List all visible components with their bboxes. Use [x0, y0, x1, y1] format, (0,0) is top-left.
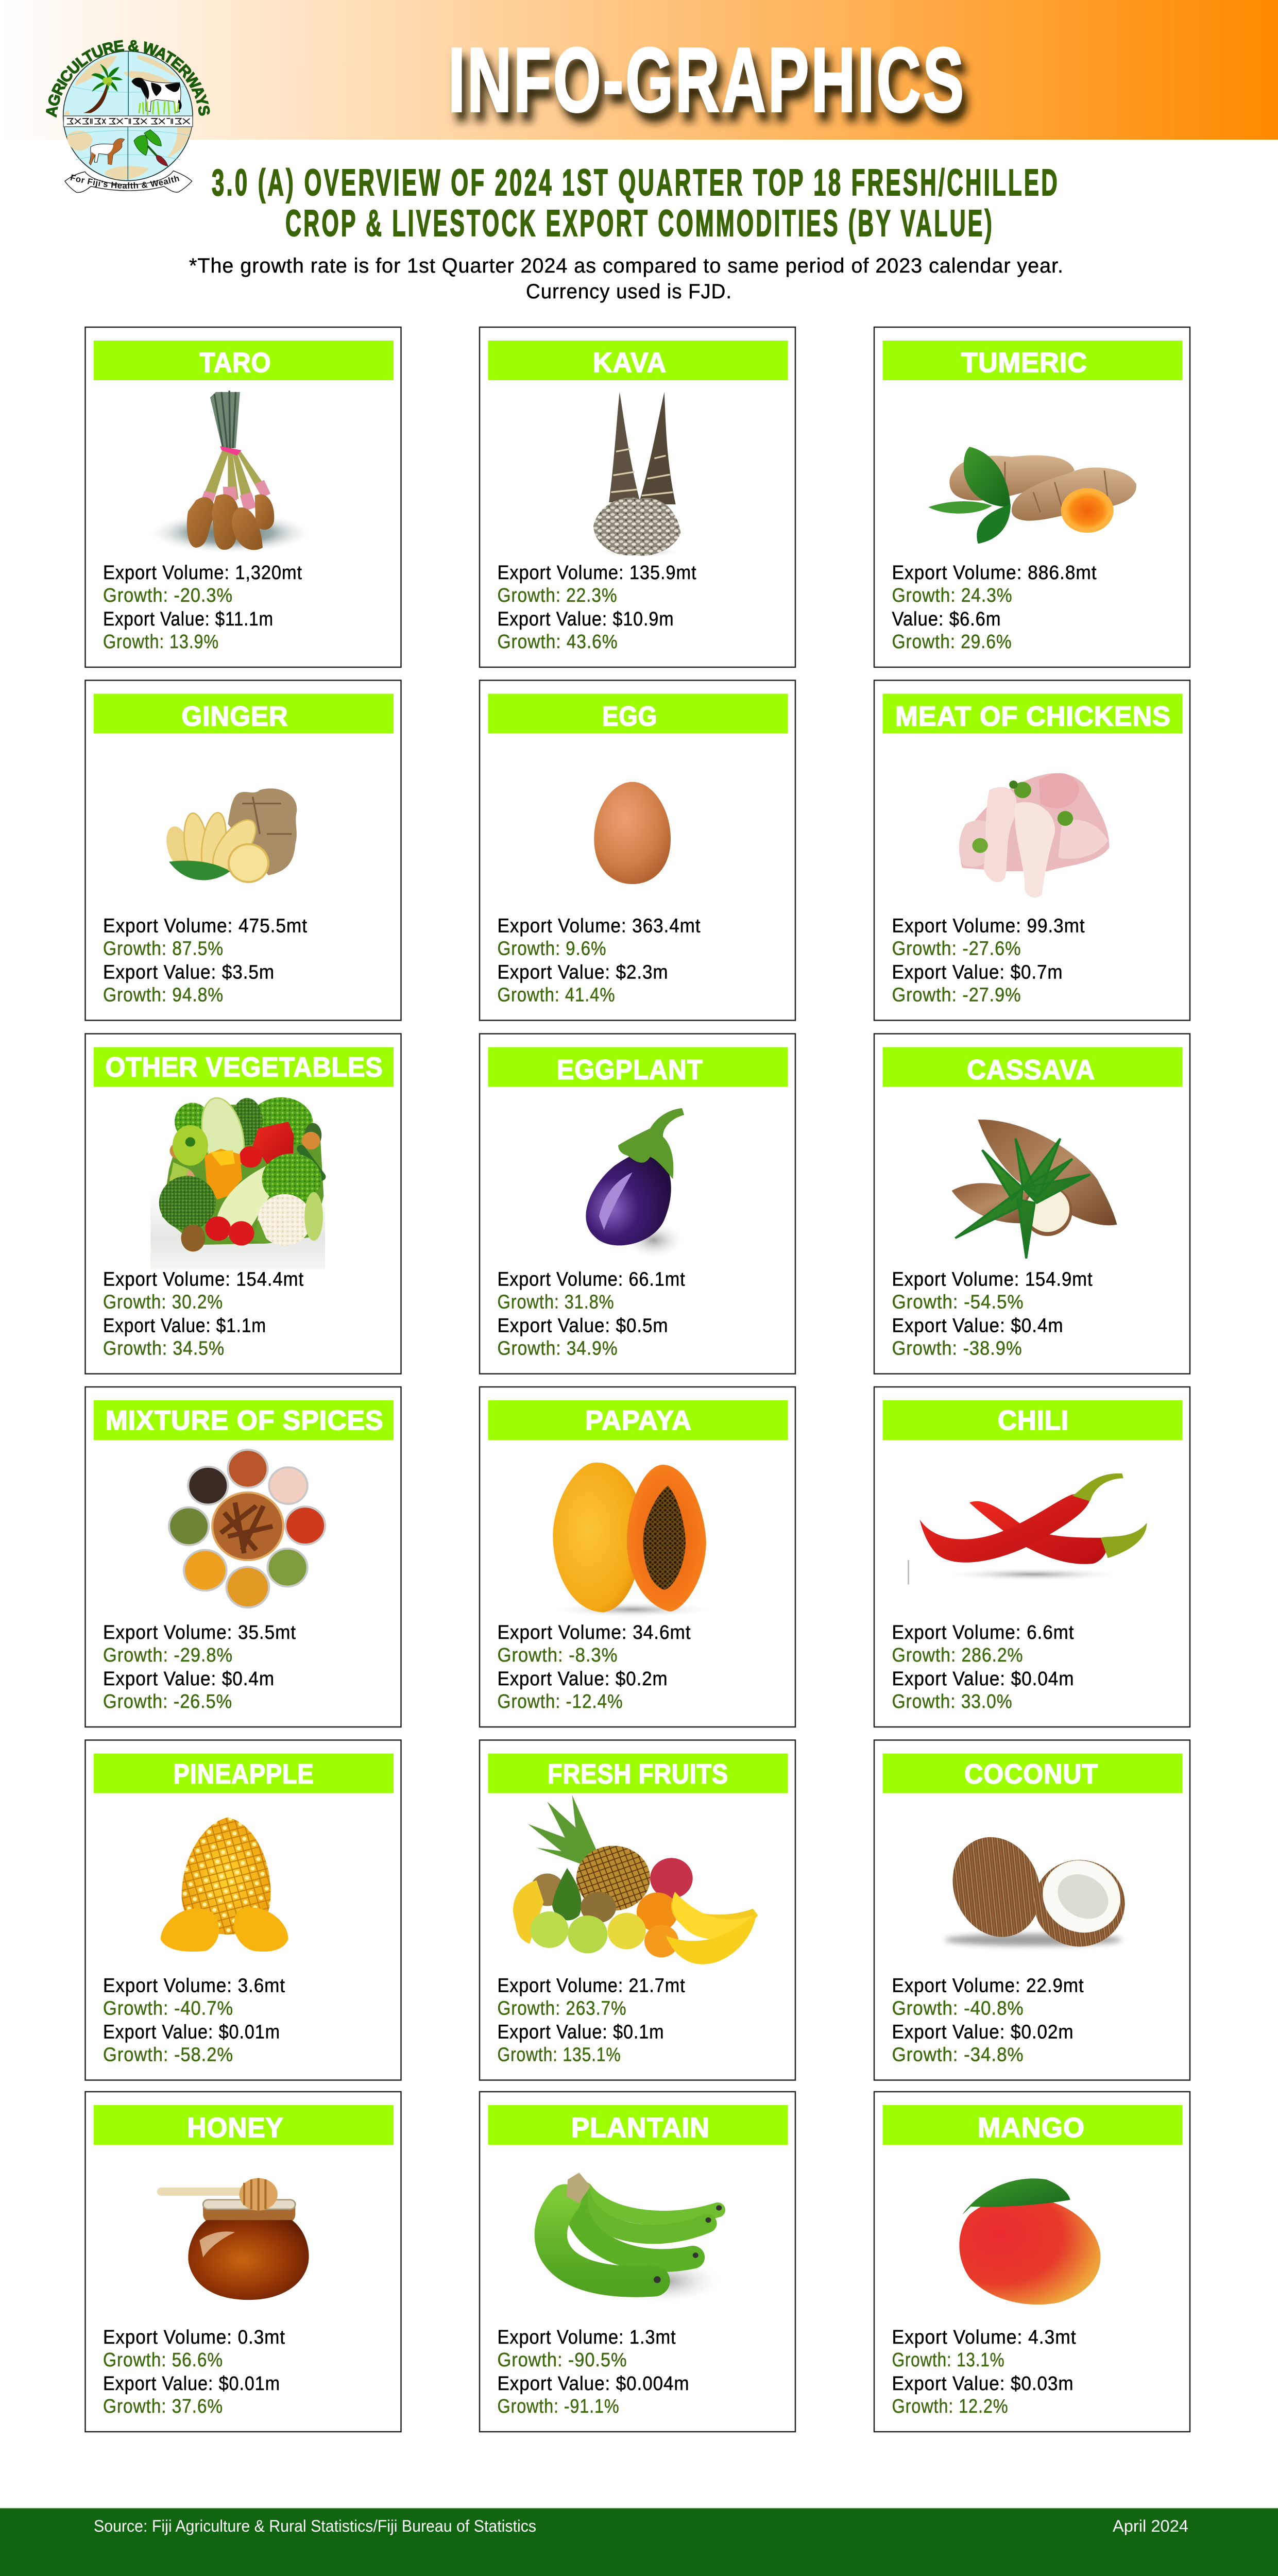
- stats: egg: [498, 915, 701, 1006]
- card frame: [874, 1387, 1190, 1727]
- stats: mango: Growth: 12.2%: [892, 2396, 1009, 2417]
- image: green plantain bunch: [551, 2173, 725, 2304]
- title: plantain: [488, 2105, 788, 2145]
- stats: taro: [103, 562, 302, 653]
- card frame: [86, 1740, 401, 2080]
- header band: [0, 0, 1278, 140]
- stats: eggplant: [498, 1268, 685, 1359]
- title: kava: [488, 341, 788, 380]
- stats: coconut: Growth: -34.8%: [892, 2044, 1024, 2066]
- card frame: [86, 327, 401, 667]
- panel: coconut: [874, 1740, 1190, 2080]
- stats: cassava: Export Value: $0.4m: [892, 1315, 1063, 1336]
- stats: mixture of spices: Export Volume: 35.5mt: [103, 1622, 296, 1643]
- panel: plantain: [480, 2092, 795, 2432]
- stats: meat of chickens: Growth: -27.6%: [892, 938, 1021, 959]
- stats: ginger: [103, 915, 308, 1006]
- stats: chili: Growth: 286.2%: [892, 1645, 1023, 1666]
- card frame: [480, 2092, 795, 2432]
- stats: ginger: Export Volume: 475.5mt: [103, 915, 308, 937]
- image: pineapple: [161, 1817, 288, 1952]
- stats: kava: Export Value: $10.9m: [498, 608, 674, 630]
- title: egg: EGG: [602, 701, 657, 732]
- stats: mixture of spices: Export Value: $0.4m: [103, 1668, 275, 1690]
- source text: Source: Fiji Agriculture & Rural Statistics/Fiji Bureau of Statistics: [94, 2517, 536, 2535]
- title: fresh fruits: [488, 1754, 788, 1793]
- logo palm tree: [83, 64, 123, 113]
- logo ribbon: [64, 170, 193, 193]
- stats: fresh fruits: Export Value: $0.1m: [498, 2022, 664, 2043]
- card frame: [874, 680, 1190, 1020]
- image: turmeric root with leaves: [928, 447, 1136, 544]
- stats: taro: Growth: -20.3%: [103, 585, 233, 606]
- title: pineapple: [94, 1754, 394, 1793]
- image: ginger root: [162, 788, 297, 882]
- stats: plantain: Export Volume: 1.3mt: [498, 2327, 676, 2348]
- stats: papaya: Export Value: $0.2m: [498, 1668, 668, 1690]
- panel: cassava: [874, 1033, 1190, 1374]
- title: mango: [883, 2105, 1183, 2145]
- panel: mixture of spices: [86, 1387, 401, 1727]
- note on growth rate and currency: *The growth rate is for 1st Quarter 2024 as compared to same period of 2023 calendar year.: [189, 255, 1064, 277]
- stats: meat of chickens: Growth: -27.9%: [892, 984, 1021, 1006]
- stats: mixture of spices: [103, 1622, 296, 1713]
- stats: fresh fruits: Growth: 135.1%: [498, 2044, 621, 2066]
- stats: plantain: Growth: -90.5%: [498, 2349, 627, 2371]
- main title: INFO-GRAPHICS: [448, 29, 966, 131]
- card frame: [86, 680, 401, 1020]
- logo cow: [132, 78, 182, 115]
- stats: cassava: Growth: -54.5%: [892, 1291, 1024, 1313]
- card frame: [874, 1740, 1190, 2080]
- logo taro plant: [134, 130, 168, 166]
- title: fresh fruits: FRESH FRUITS: [548, 1759, 728, 1790]
- stats: eggplant: Export Volume: 66.1mt: [498, 1268, 685, 1290]
- stats: pineapple: Growth: -40.7%: [103, 1998, 233, 2020]
- stats: mixture of spices: Growth: -29.8%: [103, 1645, 233, 1666]
- stats: tumeric: Export Volume: 886.8mt: [892, 562, 1097, 584]
- stats: egg: Growth: 9.6%: [498, 938, 607, 959]
- stats: pineapple: Growth: -58.2%: [103, 2044, 233, 2066]
- panel: meat of chickens: [874, 680, 1190, 1020]
- title: coconut: COCONUT: [964, 1759, 1098, 1790]
- stats: ginger: Growth: 94.8%: [103, 984, 224, 1006]
- panel: tumeric: [874, 327, 1190, 667]
- logo globe: [63, 51, 193, 181]
- stats: fresh fruits: Growth: 263.7%: [498, 1998, 626, 2020]
- stats: taro: Growth: 13.9%: [103, 631, 219, 653]
- stats: chili: Export Volume: 6.6mt: [892, 1622, 1075, 1643]
- stats: papaya: Growth: -12.4%: [498, 1691, 623, 1713]
- stats: honey: Growth: 56.6%: [103, 2349, 223, 2371]
- image: egg: [594, 782, 671, 884]
- stats: coconut: Export Value: $0.02m: [892, 2022, 1073, 2043]
- stats: plantain: [498, 2327, 689, 2417]
- stats: tumeric: [892, 562, 1097, 653]
- card frame: [874, 2092, 1190, 2432]
- panel: egg: [480, 680, 795, 1020]
- title: chili: CHILI: [998, 1405, 1069, 1436]
- card frame: [874, 327, 1190, 667]
- stats: ginger: Export Value: $3.5m: [103, 961, 275, 983]
- title: tumeric: [883, 341, 1183, 380]
- card frame: [86, 2092, 401, 2432]
- stats: coconut: [892, 1975, 1084, 2066]
- title: plantain: PLANTAIN: [571, 2112, 710, 2143]
- stats: kava: Export Volume: 135.9mt: [498, 562, 696, 584]
- title: pineapple: PINEAPPLE: [173, 1759, 314, 1790]
- title: coconut: [883, 1754, 1183, 1793]
- stats: other vegetables: [103, 1268, 304, 1359]
- stats: honey: Export Value: $0.01m: [103, 2373, 280, 2395]
- stats: coconut: Growth: -40.8%: [892, 1998, 1024, 2020]
- image: eggplant: [586, 1108, 686, 1259]
- panel: chili: [874, 1387, 1190, 1727]
- stats: other vegetables: Growth: 34.5%: [103, 1337, 225, 1359]
- title: mixture of spices: MIXTURE OF SPICES: [105, 1405, 383, 1436]
- stats: eggplant: Growth: 31.8%: [498, 1291, 614, 1313]
- stats: egg: Export Volume: 363.4mt: [498, 915, 701, 937]
- title: eggplant: [488, 1047, 788, 1087]
- stats: pineapple: Export Volume: 3.6mt: [103, 1975, 285, 1997]
- image: taro bundle: [146, 391, 314, 554]
- heading: [212, 162, 1060, 244]
- title: cassava: [883, 1047, 1183, 1087]
- title: mango: MANGO: [978, 2112, 1085, 2143]
- panel: papaya: [480, 1387, 795, 1727]
- panel: eggplant: [480, 1033, 795, 1374]
- stats: honey: [103, 2327, 285, 2417]
- date text: April 2024: [1113, 2517, 1188, 2535]
- panel: kava: [480, 327, 795, 667]
- stats: egg: Growth: 41.4%: [498, 984, 615, 1006]
- panel: fresh fruits: [480, 1740, 795, 2080]
- title: egg: [488, 693, 788, 734]
- stats: mango: Export Volume: 4.3mt: [892, 2327, 1077, 2348]
- stats: taro: Export Volume: 1,320mt: [103, 562, 302, 584]
- stats: pineapple: [103, 1975, 285, 2066]
- stats: kava: Growth: 22.3%: [498, 585, 617, 606]
- title: cassava: CASSAVA: [967, 1054, 1095, 1085]
- stats: ginger: Growth: 87.5%: [103, 938, 224, 959]
- image: cassava roots and leaves: [952, 1120, 1117, 1259]
- card frame: [480, 1740, 795, 2080]
- stats: honey: Export Volume: 0.3mt: [103, 2327, 285, 2348]
- image: mango with leaf: [959, 2178, 1101, 2304]
- stats: chili: Growth: 33.0%: [892, 1691, 1013, 1713]
- card frame: [480, 1387, 795, 1727]
- card frame: [86, 1387, 401, 1727]
- title: meat of chickens: MEAT OF CHICKENS: [895, 701, 1171, 732]
- stats: cassava: Export Volume: 154.9mt: [892, 1268, 1093, 1290]
- stats: kava: Growth: 43.6%: [498, 631, 618, 653]
- stats: papaya: Growth: -8.3%: [498, 1645, 618, 1666]
- note on growth rate and currency: [189, 255, 1064, 303]
- image: assorted vegetables: [150, 1094, 328, 1269]
- stats: fresh fruits: Export Volume: 21.7mt: [498, 1975, 685, 1997]
- title: eggplant: EGGPLANT: [557, 1054, 703, 1085]
- panel: pineapple: [86, 1740, 401, 2080]
- title: papaya: PAPAYA: [585, 1405, 692, 1436]
- stats: coconut: Export Volume: 22.9mt: [892, 1975, 1084, 1997]
- stats: cassava: Growth: -38.9%: [892, 1337, 1022, 1359]
- stats: plantain: Export Value: $0.004m: [498, 2373, 689, 2395]
- image: papaya whole and halved: [551, 1463, 714, 1618]
- stats: mango: Growth: 13.1%: [892, 2349, 1004, 2371]
- card frame: [480, 327, 795, 667]
- footer bar: [0, 2508, 1278, 2576]
- stats: kava: [498, 562, 696, 653]
- image: bowls of spices: [169, 1450, 325, 1607]
- logo ribbon: For Fiji's Health & Wealth: [70, 174, 179, 189]
- card frame: [480, 680, 795, 1020]
- image: fruit assortment: [513, 1795, 758, 1964]
- stats: other vegetables: Export Value: $1.1m: [103, 1315, 266, 1336]
- panel: honey: [86, 2092, 401, 2432]
- stats: meat of chickens: Export Value: $0.7m: [892, 961, 1063, 983]
- stats: taro: Export Value: $11.1m: [103, 608, 274, 630]
- image: kava roots: [593, 392, 682, 557]
- logo sheep: [89, 139, 125, 165]
- image: coconut whole and halved: [940, 1826, 1138, 1959]
- logo arched name: AGRICULTURE & WATERWAYS: [46, 40, 210, 118]
- title: taro: [94, 341, 394, 380]
- panel: taro: [86, 327, 401, 667]
- stats: cassava: [892, 1268, 1093, 1359]
- title: ginger: [94, 693, 394, 734]
- title: papaya: [488, 1400, 788, 1440]
- stats: tumeric: Value: $6.6m: [892, 608, 1001, 630]
- stats: other vegetables: Growth: 30.2%: [103, 1291, 223, 1313]
- stats: papaya: Export Volume: 34.6mt: [498, 1622, 691, 1643]
- stats: plantain: Growth: -91.1%: [498, 2396, 619, 2417]
- card frame: [480, 1033, 795, 1374]
- title: taro: TARO: [200, 347, 271, 378]
- stats: other vegetables: Export Volume: 154.4mt: [103, 1268, 304, 1290]
- stats: eggplant: Export Value: $0.5m: [498, 1315, 669, 1336]
- panel: ginger: [86, 680, 401, 1020]
- stats: fresh fruits: [498, 1975, 685, 2066]
- stats: mango: Export Value: $0.03m: [892, 2373, 1073, 2395]
- card frame: [86, 1033, 401, 1374]
- panel: mango: [874, 2092, 1190, 2432]
- stats: chili: [892, 1622, 1075, 1713]
- title: honey: HONEY: [188, 2112, 283, 2143]
- stats: pineapple: Export Value: $0.01m: [103, 2022, 280, 2043]
- stats: papaya: [498, 1622, 691, 1713]
- title: honey: [94, 2105, 394, 2145]
- stats: mixture of spices: Growth: -26.5%: [103, 1691, 232, 1713]
- logo band: [63, 116, 193, 127]
- title: ginger: GINGER: [181, 701, 288, 732]
- note on growth rate and currency: Currency used is FJD.: [526, 280, 732, 303]
- stats: chili: Export Value: $0.04m: [892, 1668, 1075, 1690]
- logo: ministry of agriculture and waterways: [46, 40, 210, 193]
- title: tumeric: TUMERIC: [961, 347, 1087, 378]
- image: honey jar and dipper: [157, 2178, 309, 2300]
- stats: tumeric: Growth: 24.3%: [892, 585, 1013, 606]
- stats: meat of chickens: Export Volume: 99.3mt: [892, 915, 1085, 937]
- panel: other vegetables: [86, 1033, 401, 1374]
- stats: tumeric: Growth: 29.6%: [892, 631, 1012, 653]
- stats: meat of chickens: [892, 915, 1085, 1006]
- title: kava: KAVA: [593, 347, 667, 378]
- stats: mango: [892, 2327, 1077, 2417]
- image: red chillies: [908, 1473, 1147, 1584]
- stats: honey: Growth: 37.6%: [103, 2396, 223, 2417]
- image: raw chicken pieces: [959, 773, 1109, 897]
- title: other vegetables: OTHER VEGETABLES: [105, 1052, 383, 1083]
- title: chili: [883, 1400, 1183, 1440]
- card frame: [874, 1033, 1190, 1374]
- stats: eggplant: Growth: 34.9%: [498, 1337, 618, 1359]
- stats: egg: Export Value: $2.3m: [498, 961, 669, 983]
